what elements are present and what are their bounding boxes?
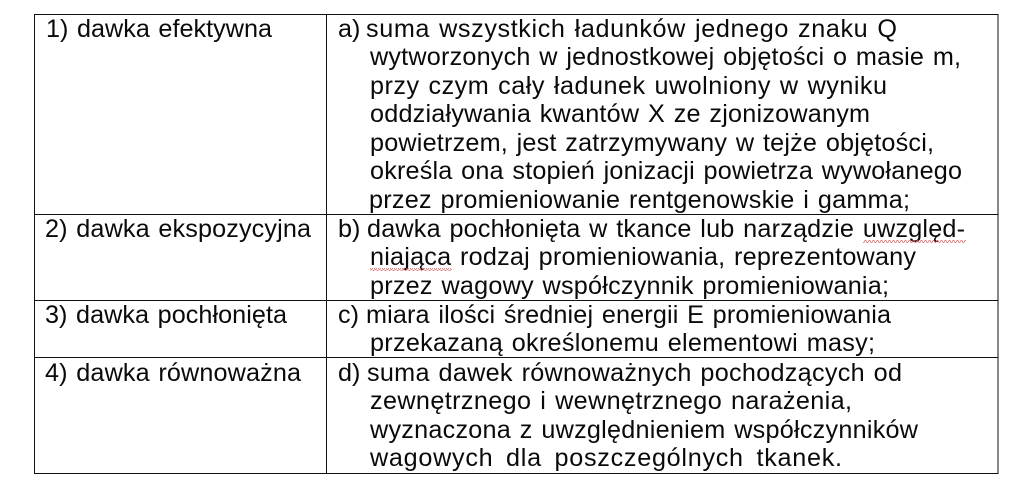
definition a: a)	[338, 15, 360, 43]
definition d: zewnętrznego i wewnętrznego narażenia,	[370, 387, 852, 415]
definition a: oddziaływania kwantów X ze zjonizowanym	[370, 100, 870, 128]
definition a: powietrzem, jest zatrzymywany w tejże objętości,	[370, 129, 934, 157]
left column: dose names: 4) dawka równoważna	[45, 359, 302, 387]
definition a: określa ona stopień jonizacji powietrza wywołanego	[370, 157, 962, 185]
definition c	[338, 301, 892, 357]
definition a: wytworzonych w jednostkowej objętości o masie m,	[369, 43, 961, 71]
definition b: niająca rodzaj promieniowania, reprezentowany	[370, 243, 916, 271]
definition b: przez wagowy współczynnik promieniowania;	[370, 272, 889, 300]
left column: dose names: 1) dawka efektywna	[46, 15, 273, 43]
left column: dose names	[45, 15, 312, 387]
definition d	[338, 359, 919, 472]
definition b	[338, 215, 965, 300]
definition c: c)	[338, 301, 359, 329]
definition c: miara ilości średniej energii E promieniowania	[366, 301, 892, 329]
definition d: suma dawek równoważnych pochodzących od	[367, 359, 902, 387]
definition a: suma wszystkich ładunków jednego znaku Q	[366, 15, 897, 43]
definition a	[338, 15, 962, 214]
definition d: d)	[338, 359, 360, 387]
left column: dose names: 2) dawka ekspozycyjna	[45, 215, 312, 243]
definition b: dawka pochłonięta w tkance lub narządzie uwzględ-	[367, 215, 965, 243]
definition a: przy czym cały ładunek uwolniony w wyniku	[370, 72, 887, 100]
spell-check squiggles	[370, 240, 966, 271]
left column: dose names: 3) dawka pochłonięta	[45, 301, 288, 329]
definition a: przez promieniowanie rentgenowskie i gamma;	[369, 186, 910, 214]
definition d: wagowych dla poszczególnych tkanek.	[369, 444, 842, 472]
definition b: b)	[338, 215, 360, 243]
definition d: wyznaczona z uwzględnieniem współczynników	[369, 416, 919, 444]
definition c: przekazaną określonemu elementowi masy;	[370, 329, 875, 357]
